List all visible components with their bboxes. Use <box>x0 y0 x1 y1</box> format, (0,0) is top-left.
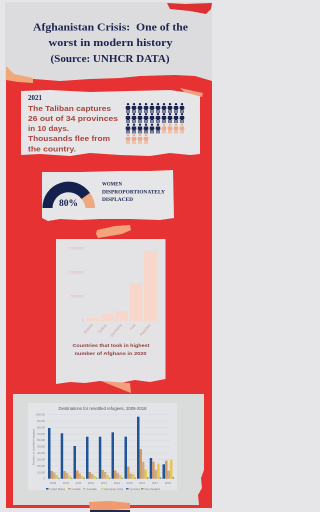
bar chart: countries: 0 <box>82 318 84 322</box>
tape: peach triangle <box>101 381 131 393</box>
bar chart: countries: Turkey <box>97 323 108 334</box>
panel: women displaced card <box>42 170 174 221</box>
bar chart: countries: 1,500,000 <box>68 246 84 250</box>
bar chart: countries: Germany <box>110 323 123 338</box>
chart: destinations for resettled refugees: 10,000 <box>37 470 46 474</box>
chart: destinations for resettled refugees: 2018 <box>165 481 172 485</box>
card text <box>28 106 118 154</box>
card text: The Taliban captures <box>28 106 111 113</box>
chart: destinations for resettled refugees: 90,000 <box>37 419 46 423</box>
chart: destinations for resettled refugees: 2013 <box>101 481 108 485</box>
chart legend <box>46 487 160 491</box>
chart: destinations for resettled refugees: 2016 <box>139 481 146 485</box>
chart: destinations for resettled refugees: 2012 <box>88 481 95 485</box>
title: worst in modern history <box>48 38 173 49</box>
chart: destinations for resettled refugees: Number of resettled refugees <box>32 428 36 465</box>
chart legend: New Zealand <box>144 487 160 491</box>
chart legend: Australia <box>86 487 97 491</box>
chart: destinations for resettled refugees: 70,000 <box>37 432 46 436</box>
header panel <box>5 2 212 82</box>
chart legend: European Union <box>104 487 124 491</box>
panel: resettlement chart card <box>13 394 204 505</box>
red background panel <box>6 75 212 508</box>
bar chart: countries: Pakistan <box>139 323 152 337</box>
gauge caption: WOMEN <box>102 182 123 188</box>
chart: destinations for resettled refugees: 2017 <box>152 481 159 485</box>
panel: host countries chart card <box>56 239 166 384</box>
chart caption <box>72 343 150 357</box>
bar chart: countries: 1,000,000 <box>68 270 84 274</box>
card text: the country. <box>28 146 76 154</box>
gauge caption <box>102 182 166 203</box>
gauge caption: DISPROPORTIONATELY <box>102 190 166 196</box>
chart: destinations for resettled refugees: 80,000 <box>37 425 46 429</box>
year label: 2021 <box>28 94 42 102</box>
bar chart: countries: Russia <box>83 322 94 335</box>
chart: destinations for resettled refugees: 2015 <box>126 481 133 485</box>
bar chart: countries <box>68 246 157 338</box>
bottom dark strip <box>90 510 130 512</box>
tape: peach bottom <box>89 501 130 510</box>
chart: destinations for resettled refugees: 2009 <box>50 481 57 485</box>
chart: destinations for resettled refugees: 2010 <box>63 481 70 485</box>
chart: destinations for resettled refugees: 50,000 <box>37 444 46 448</box>
chart caption: number of Afghans in 2020 <box>74 351 147 357</box>
title: Afghanistan Crisis: One of the <box>33 22 188 34</box>
tape: peach centre <box>96 225 131 238</box>
tape: top right <box>167 3 212 14</box>
chart: destinations for resettled refugees <box>28 403 177 491</box>
tape: card corner <box>180 88 203 97</box>
bar chart: countries: 500,000 <box>71 294 84 298</box>
chart title: Destinations for resettled refugees, 2009-2018 <box>58 406 147 411</box>
icon array: 26 of 34 provinces <box>126 103 184 144</box>
tape: left peach <box>6 66 33 83</box>
gauge caption: DISPLACED <box>102 198 134 203</box>
chart: destinations for resettled refugees: 30,000 <box>37 458 46 462</box>
chart: destinations for resettled refugees: 0 <box>44 477 46 481</box>
card text: 26 out of 34 provinces <box>28 116 118 123</box>
chart: destinations for resettled refugees: 2014 <box>114 481 121 485</box>
title: (Source: UNHCR DATA) <box>50 54 170 65</box>
chart: destinations for resettled refugees: 2011 <box>75 481 82 485</box>
chart: destinations for resettled refugees: 100,000 <box>36 412 46 416</box>
chart legend: United States <box>50 487 66 491</box>
chart: destinations for resettled refugees: 20,000 <box>37 464 46 468</box>
chart legend: Canada <box>72 487 81 491</box>
bar chart: countries: Iran <box>129 323 137 331</box>
panel: 2021 Taliban card <box>21 88 203 156</box>
card text: in 10 days. <box>28 126 69 133</box>
card text: Thousands flee from <box>28 136 110 143</box>
chart caption: Countries that took in highest <box>72 343 150 349</box>
infographic canvas <box>5 2 212 512</box>
chart: destinations for resettled refugees: 60,000 <box>37 438 46 442</box>
chart: destinations for resettled refugees: 40,000 <box>37 451 46 455</box>
gauge: 80 percent: 80% <box>59 199 78 209</box>
chart legend: Germany <box>130 487 141 491</box>
title <box>33 22 188 65</box>
